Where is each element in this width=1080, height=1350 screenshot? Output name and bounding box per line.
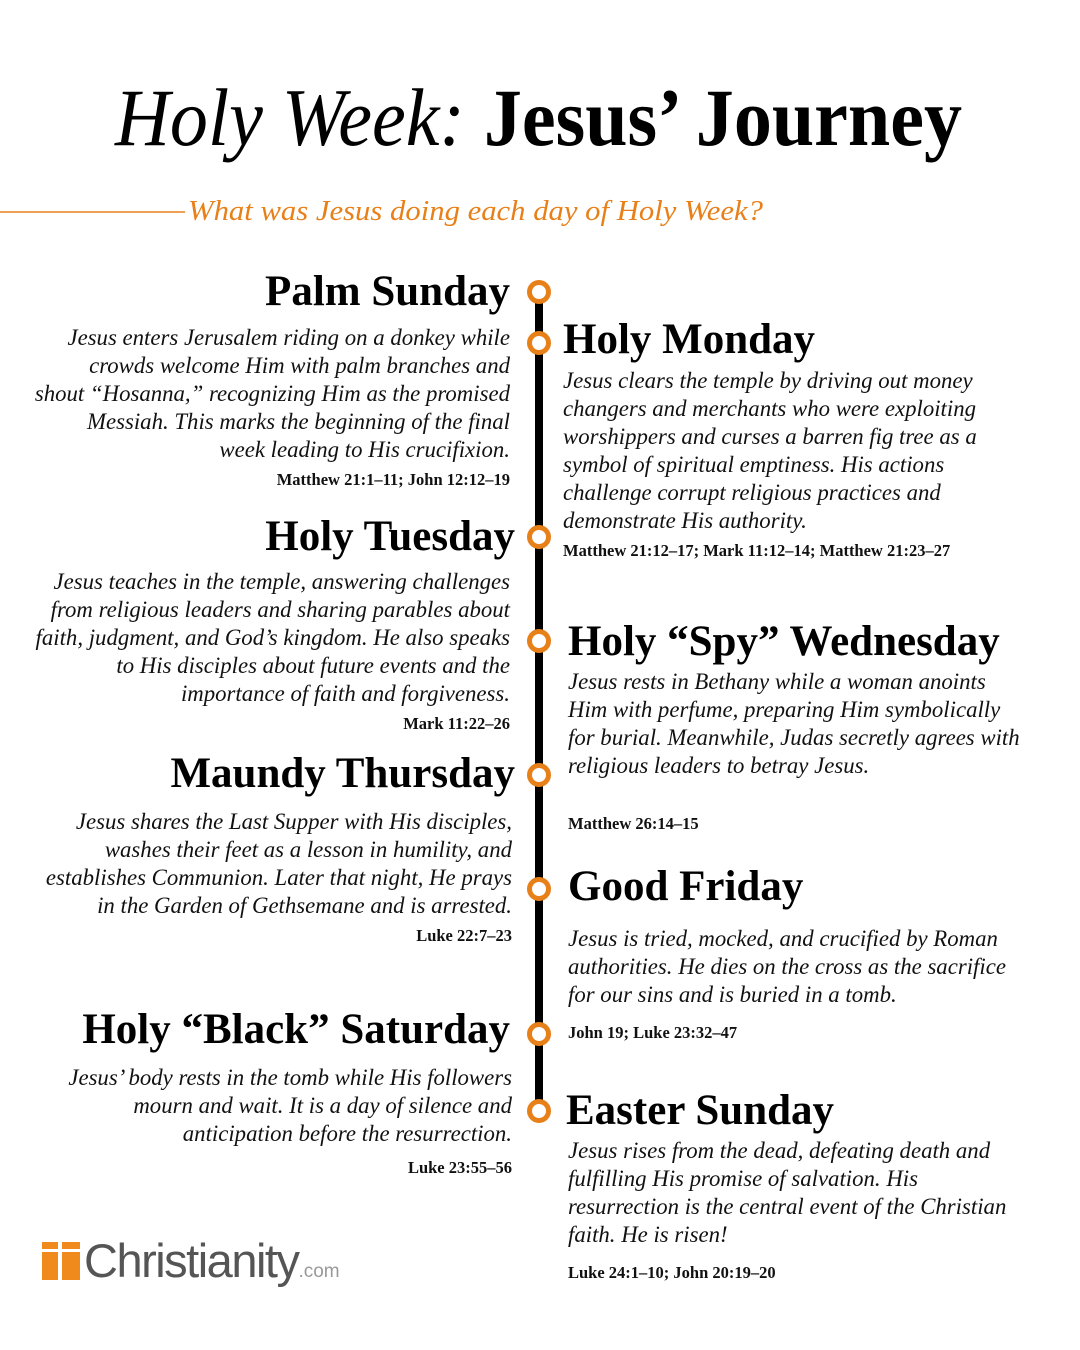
panel: holy black saturday: mourn and wait. It is a day of silence and [133, 1093, 512, 1118]
panel: easter sunday: Jesus rises from the dead, defeating death and [568, 1138, 990, 1163]
panel: palm sunday: shout “Hosanna,” recognizing Him as the promised [35, 381, 510, 406]
panel: holy tuesday: Holy Tuesday [265, 513, 515, 560]
panel: holy monday: demonstrate His authority. [563, 508, 807, 533]
panel: holy monday: Holy Monday [563, 316, 815, 363]
panel: maundy thursday: Jesus shares the Last Supper with His disciples, [76, 809, 512, 834]
logo: Christianity.com [84, 1234, 340, 1287]
panel: palm sunday: week leading to His crucifixion. [219, 437, 510, 462]
panel: holy spy wednesday: religious leaders to betray Jesus. [568, 753, 869, 778]
panel: easter sunday [566, 1087, 1006, 1282]
panel: holy monday [563, 316, 977, 560]
panel: holy spy wednesday: Him with perfume, preparing Him symbolically [568, 697, 1000, 722]
panel: easter sunday: resurrection is the central event of the Christian [568, 1194, 1006, 1219]
panel: holy black saturday: Luke 23:55–56 [408, 1158, 512, 1177]
panel: holy tuesday [36, 513, 515, 733]
panel: palm sunday: crowds welcome Him with palm branches and [89, 353, 510, 378]
panel: maundy thursday: Luke 22:7–23 [416, 926, 512, 945]
panel: palm sunday: Matthew 21:1–11; John 12:12–19 [277, 470, 510, 489]
panel: holy tuesday: importance of faith and forgiveness. [181, 681, 510, 706]
panel: palm sunday: Messiah. This marks the beginning of the final [87, 409, 510, 434]
panel: holy monday: worshippers and curses a barren fig tree as a [563, 424, 977, 449]
icon: cross [42, 1242, 80, 1280]
panel: holy spy wednesday: Matthew 26:14–15 [568, 814, 699, 833]
panel: holy monday: challenge corrupt religious practices and [563, 480, 941, 505]
panel: maundy thursday: Maundy Thursday [170, 750, 515, 797]
panel: holy tuesday: to His disciples about future events and the [116, 653, 510, 678]
panel: holy spy wednesday [568, 618, 1020, 833]
panel: holy tuesday: Mark 11:22–26 [403, 714, 510, 733]
panel: holy black saturday: Holy “Black” Saturday [82, 1006, 510, 1053]
panel: palm sunday: Palm Sunday [265, 268, 510, 315]
panel: holy black saturday [68, 1006, 512, 1177]
panel: easter sunday: Easter Sunday [566, 1087, 834, 1134]
panel: good friday: Good Friday [568, 863, 803, 910]
panel: holy black saturday: anticipation before the resurrection. [183, 1121, 512, 1146]
panel: holy tuesday: Jesus teaches in the temple, answering challenges [54, 569, 510, 594]
panel: holy spy wednesday: Holy “Spy” Wednesday [568, 618, 1000, 665]
title: Holy Week: Jesus’ Journey [114, 72, 962, 163]
panel: holy monday: symbol of spiritual emptiness. His actions [563, 452, 944, 477]
subtitle: What was Jesus doing each day of Holy Week? [188, 195, 764, 227]
panel: holy monday: Matthew 21:12–17; Mark 11:12–14; Matthew 21:23–27 [563, 541, 950, 560]
panel: easter sunday: fulfilling His promise of salvation. His [568, 1166, 918, 1191]
panel: good friday: authorities. He dies on the cross as the sacrifice [568, 954, 1006, 979]
panel: holy spy wednesday: Jesus rests in Bethany while a woman anoints [568, 669, 986, 694]
panel: palm sunday: Jesus enters Jerusalem riding on a donkey while [67, 325, 510, 350]
panel: good friday [568, 863, 1006, 1042]
panel: maundy thursday: in the Garden of Gethsemane and is arrested. [97, 893, 512, 918]
panel: holy spy wednesday: for burial. Meanwhile, Judas secretly agrees with [568, 725, 1020, 750]
panel: easter sunday: Luke 24:1–10; John 20:19–20 [568, 1263, 776, 1282]
panel: palm sunday [35, 268, 510, 489]
panel: holy black saturday: Jesus’ body rests in the tomb while His followers [68, 1065, 512, 1090]
panel: good friday: John 19; Luke 23:32–47 [568, 1023, 737, 1042]
panel: maundy thursday: establishes Communion. Later that night, He prays [46, 865, 512, 890]
panel: easter sunday: faith. He is risen! [568, 1222, 728, 1247]
panel: holy monday: changers and merchants who were exploiting [563, 396, 976, 421]
panel: holy tuesday: from religious leaders and sharing parables about [51, 597, 510, 622]
panel: holy monday: Jesus clears the temple by driving out money [563, 368, 973, 393]
panel: holy tuesday: faith, judgment, and God’s kingdom. He also speaks [36, 625, 510, 650]
panel: good friday: Jesus is tried, mocked, and crucified by Roman [568, 926, 998, 951]
panel: maundy thursday [46, 750, 515, 945]
panel: good friday: for our sins and is buried in a tomb. [568, 982, 897, 1007]
panel: maundy thursday: washes their feet as a lesson in humility, and [105, 837, 512, 862]
